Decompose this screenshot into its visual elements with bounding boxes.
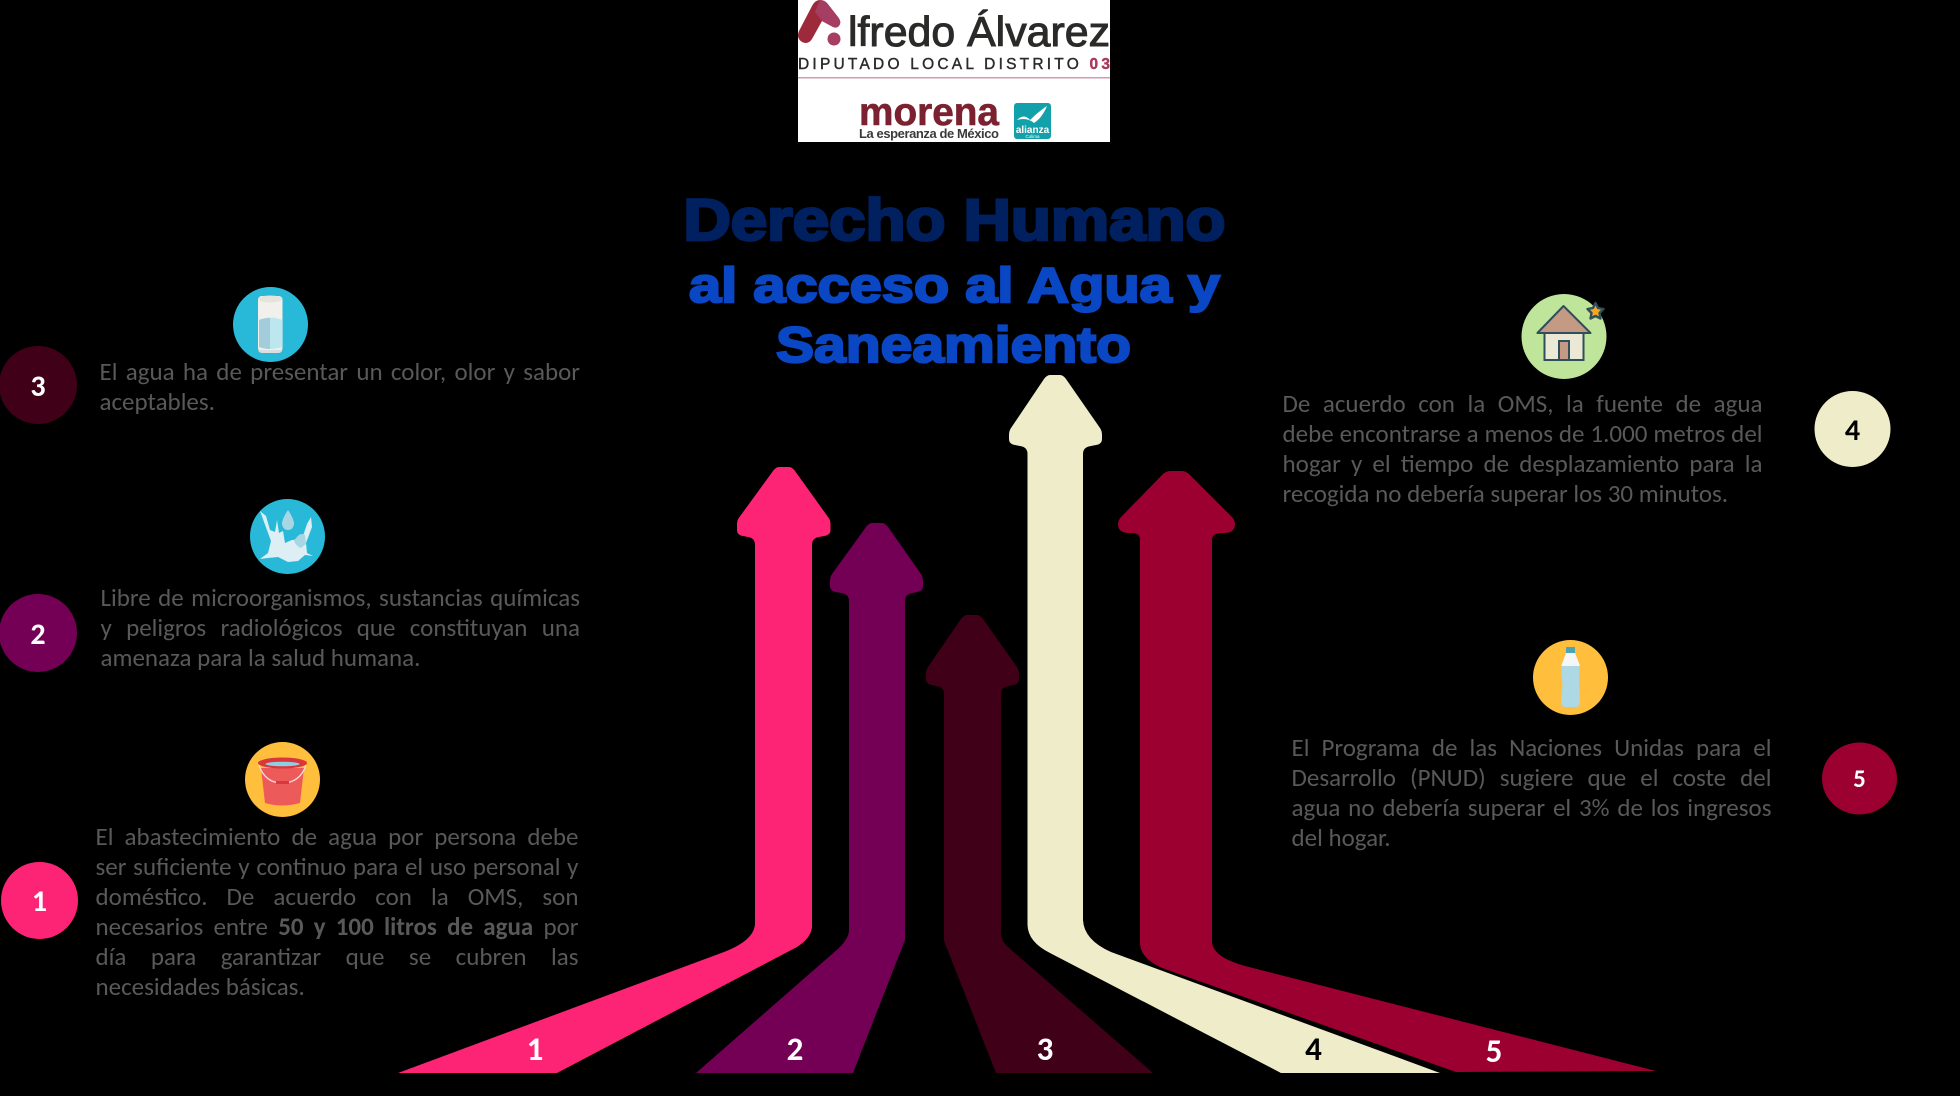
arrow 5: crimson: 5 bbox=[1486, 1031, 1502, 1071]
text block 2: free of contaminants: Libre de microorganismos, sustancias químicas bbox=[100, 582, 580, 613]
text block 1: sufficient supply: El abastecimiento de agua por persona debe bbox=[96, 821, 578, 852]
badge 4 bbox=[1814, 391, 1890, 467]
text block 2: free of contaminants bbox=[100, 582, 580, 673]
badge 2: 2 bbox=[30, 616, 46, 653]
arrow 3: dark maroon bbox=[926, 615, 1153, 1073]
arrow 4: cream: 4 bbox=[1305, 1029, 1322, 1069]
text block 5: affordable cost: Desarrollo (PNUD) sugiere que el coste del bbox=[1292, 762, 1772, 793]
logo: Alfredo Álvarez, Morena, Alianza: La esperanza de México bbox=[859, 126, 999, 141]
title: Derecho Humano bbox=[684, 188, 1226, 253]
arrow 5: crimson bbox=[1118, 471, 1656, 1072]
logo: Alfredo Álvarez, Morena, Alianza: lfredo Álvarez bbox=[848, 8, 1110, 55]
text block 3: colour, odour, taste: El agua ha de presentar un color, olor y sabor bbox=[100, 356, 580, 387]
text block 4: distance to source: hogar y el tiempo de desplazamiento para la bbox=[1282, 448, 1762, 479]
text block 4: distance to source bbox=[1282, 388, 1762, 509]
logo: Alfredo Álvarez, Morena, Alianza: Colima bbox=[1025, 134, 1040, 139]
text block 2: free of contaminants: amenaza para la salud humana. bbox=[100, 642, 420, 673]
badge 3: 3 bbox=[30, 368, 46, 405]
title: Saneamiento bbox=[776, 317, 1131, 373]
arrow 4: cream bbox=[1009, 375, 1440, 1073]
text block 1: sufficient supply: necesidades básicas. bbox=[96, 971, 305, 1002]
text block 1: sufficient supply bbox=[96, 821, 578, 1002]
badge 1: 1 bbox=[32, 883, 47, 920]
badge 5 bbox=[1822, 742, 1897, 814]
title: al acceso al Agua y bbox=[689, 259, 1220, 313]
text block 4: distance to source: recogida no debería superar los 30 minutos. bbox=[1282, 478, 1728, 509]
badge 3 bbox=[0, 346, 77, 424]
text block 5: affordable cost: agua no debería superar el 3% de los ingresos bbox=[1292, 792, 1772, 823]
text block 1: sufficient supply: necesarios entre 50 y 100 litros de agua por bbox=[96, 911, 578, 942]
logo: Alfredo Álvarez, Morena, Alianza: DIPUTADO LOCAL DISTRITO 03 bbox=[798, 56, 1110, 73]
icon: house with star bbox=[1522, 294, 1606, 379]
arrow 2: purple bbox=[696, 523, 923, 1073]
icon: water splash bbox=[250, 499, 325, 574]
arrow 2: purple: 2 bbox=[787, 1029, 803, 1069]
icon: water bottle bbox=[1533, 640, 1608, 715]
text block 3: colour, odour, taste: aceptables. bbox=[100, 386, 215, 417]
icon: red bucket bbox=[245, 742, 320, 817]
text block 5: affordable cost: El Programa de las Naciones Unidas para el bbox=[1292, 732, 1772, 763]
text block 4: distance to source: debe encontrarse a menos de 1.000 metros del bbox=[1282, 418, 1762, 449]
badge 5: 5 bbox=[1853, 763, 1866, 794]
logo: Alfredo Álvarez, Morena, Alianza bbox=[798, 0, 1110, 142]
badge 1 bbox=[1, 862, 78, 939]
arrow 1: pink bbox=[398, 467, 830, 1073]
text block 1: sufficient supply: día para garantizar que se cubren las bbox=[96, 941, 578, 972]
logo: Alfredo Álvarez, Morena, Alianza: alianza bbox=[1016, 125, 1050, 136]
badge 2 bbox=[0, 594, 77, 672]
text block 4: distance to source: De acuerdo con la OMS, la fuente de agua bbox=[1282, 388, 1762, 419]
logo: Alfredo Álvarez, Morena, Alianza: morena bbox=[859, 91, 999, 134]
text block 2: free of contaminants: y peligros radiológicos que constituyan una bbox=[100, 612, 580, 643]
text block 5: affordable cost: del hogar. bbox=[1292, 822, 1391, 853]
arrow 1: pink: 1 bbox=[527, 1029, 543, 1069]
arrow 3: dark maroon: 3 bbox=[1037, 1029, 1053, 1069]
text block 1: sufficient supply: ser suficiente y continuo para el uso personal y bbox=[96, 851, 578, 882]
badge 4: 4 bbox=[1845, 412, 1860, 449]
icon: water glass bbox=[233, 287, 308, 362]
text block 1: sufficient supply: doméstico. De acuerdo con la OMS, son bbox=[96, 881, 578, 912]
text block 3: colour, odour, taste bbox=[100, 356, 580, 417]
title bbox=[684, 188, 1226, 373]
text block 5: affordable cost bbox=[1292, 732, 1772, 853]
